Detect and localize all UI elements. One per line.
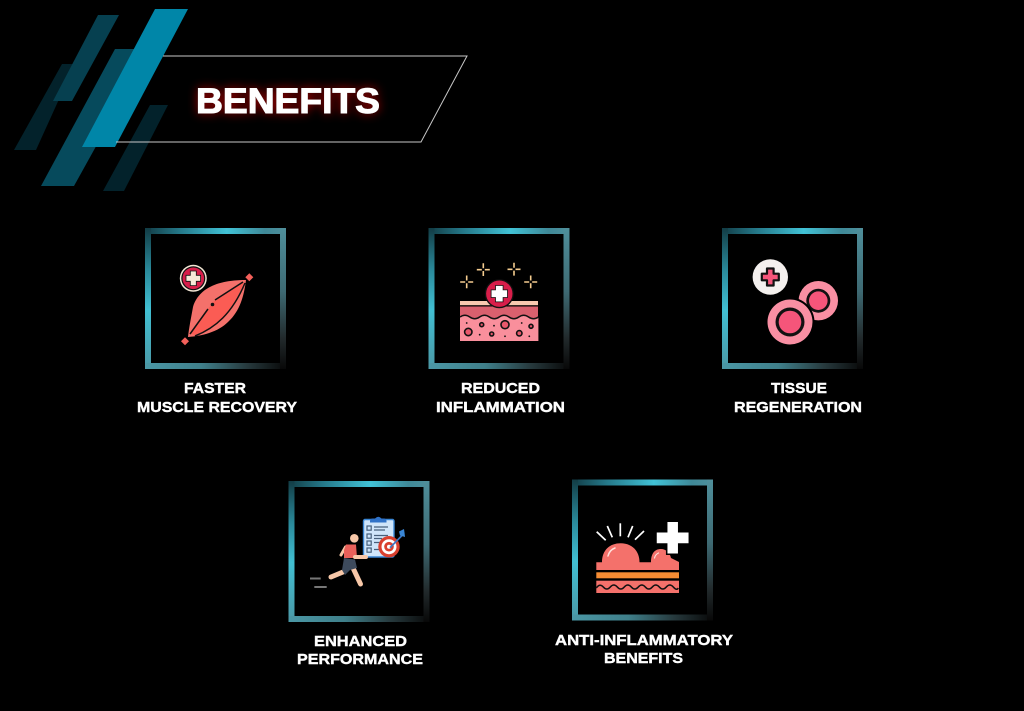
label <box>436 380 565 416</box>
frame <box>722 228 863 369</box>
title: BENEFITS <box>196 82 380 121</box>
icon: muscle with plus badge <box>180 265 253 345</box>
panel: reduced inflammation <box>428 228 570 416</box>
frame <box>428 228 570 369</box>
icon: skin with plus badge <box>460 263 538 341</box>
label: ANTI-INFLAMMATORY <box>555 632 733 649</box>
label: MUSCLE RECOVERY <box>137 399 297 416</box>
frame <box>145 228 286 369</box>
panel: enhanced performance <box>288 481 430 668</box>
frame <box>288 481 430 622</box>
label: FASTER <box>184 380 246 397</box>
label <box>734 380 862 416</box>
icon: swollen skin with plus <box>596 521 689 593</box>
label <box>297 633 423 668</box>
panel: anti-inflammatory benefits <box>555 480 733 667</box>
frame <box>572 480 713 620</box>
label: REGENERATION <box>734 399 862 416</box>
label <box>137 380 297 416</box>
label: PERFORMANCE <box>297 651 423 668</box>
panel: tissue regeneration <box>722 228 863 416</box>
label: ENHANCED <box>314 633 407 650</box>
decorative header bars <box>14 9 188 191</box>
label: REDUCED <box>461 380 540 397</box>
label: INFLAMMATION <box>436 399 565 416</box>
icon: runner with clipboard and target <box>310 517 405 588</box>
label <box>555 632 733 667</box>
label: BENEFITS <box>604 650 683 667</box>
title banner outline <box>116 56 467 142</box>
label: TISSUE <box>771 380 827 397</box>
icon: cells with plus badge <box>753 259 838 346</box>
panel: faster muscle recovery <box>137 228 297 416</box>
